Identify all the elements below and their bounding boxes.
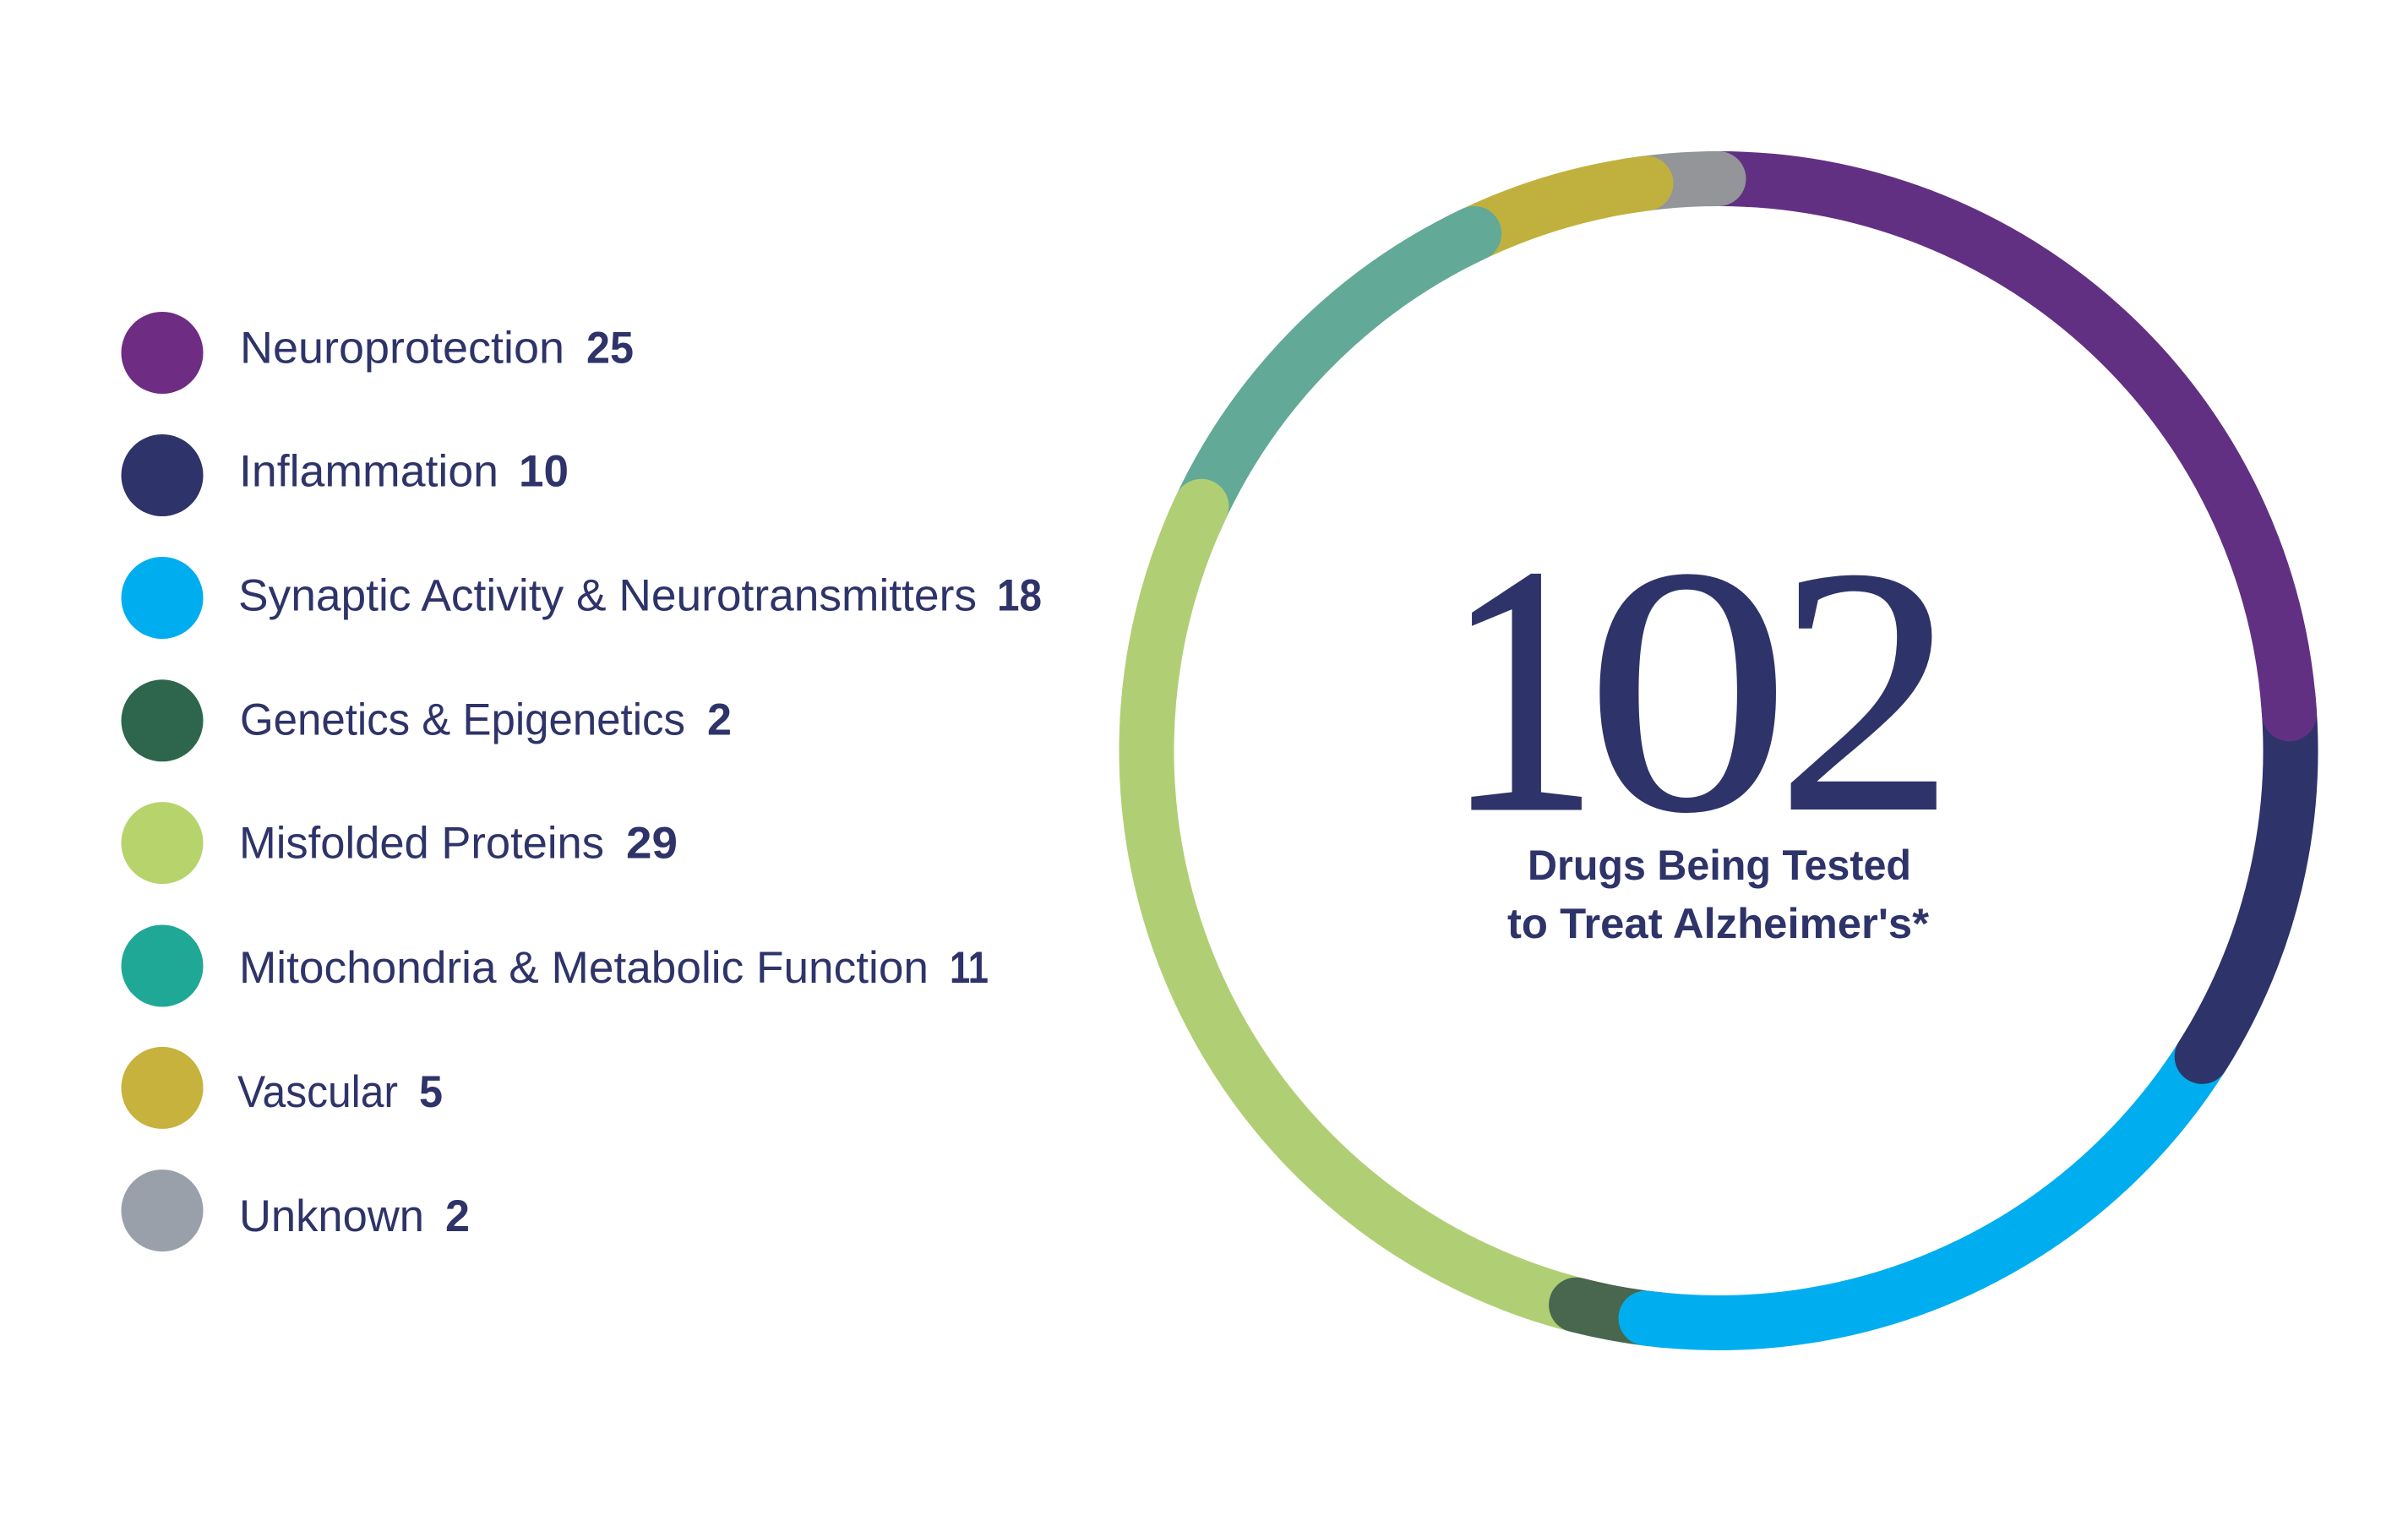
legend row: Synaptic Activity & Neurotransmitters 18: 18: [997, 571, 1042, 621]
legend row: Unknown 2: 2: [445, 1191, 470, 1241]
big number 102: 1: [1446, 495, 1598, 885]
legend row: Inflammation 10: 10: [519, 447, 569, 497]
segment: Unknown: [1628, 178, 1719, 186]
legend row: Vascular 5: [122, 1047, 443, 1129]
segment: Vascular: [1458, 183, 1646, 242]
segment: Synaptic Activity & Neurotransmitters: [1646, 1041, 2211, 1322]
legend row: Misfolded Proteins 29: Misfolded Proteins: [239, 819, 604, 869]
segment: Neuroprotection: [1719, 179, 2290, 714]
centre caption: [1507, 842, 1930, 947]
centre caption: to Treat Alzheimer's*: [1507, 900, 1930, 947]
legend row: Vascular 5: 5: [419, 1067, 443, 1117]
donut ring chart: [1147, 178, 2291, 1322]
legend row: Neuroprotection 25: 25: [586, 323, 634, 373]
legend row: Genetics & Epigenetics 2: [122, 679, 732, 761]
segment: Misfolded Proteins: [1147, 506, 1594, 1309]
legend row: Neuroprotection 25: Neuroprotection: [240, 323, 564, 373]
legend row: Neuroprotection 25: [122, 312, 634, 394]
segment: Mitochondria & Metabolic Function: [1194, 233, 1474, 522]
big number 102: [1446, 495, 1955, 885]
legend: [122, 312, 1042, 1251]
legend row: Inflammation 10: [122, 434, 569, 516]
centre caption: Drugs Being Tested: [1528, 842, 1911, 889]
legend row: Genetics & Epigenetics 2: Genetics & Epigenetics: [240, 695, 685, 745]
big number 102: 2: [1776, 496, 1955, 885]
legend row: Synaptic Activity & Neurotransmitters 18: Synaptic Activity & Neurotransmitters: [238, 571, 977, 621]
segment: Unknown rounded end cap over Neuroprotection: [1708, 151, 1719, 206]
legend row: Genetics & Epigenetics 2: 2: [707, 695, 732, 745]
legend row: Misfolded Proteins 29: [122, 802, 678, 884]
segment: Inflammation: [2202, 696, 2291, 1056]
legend row: Mitochondria & Metabolic Function 11: Mitochondria & Metabolic Function: [239, 943, 929, 993]
big number 102: 0: [1585, 496, 1790, 885]
segment: Genetics & Epigenetics: [1577, 1305, 1664, 1320]
legend row: Misfolded Proteins 29: 29: [626, 819, 678, 869]
legend row: Vascular 5: Vascular: [237, 1067, 398, 1117]
legend row: Mitochondria & Metabolic Function 11: 11: [950, 943, 989, 993]
legend row: Synaptic Activity & Neurotransmitters 18: [122, 557, 1042, 639]
legend row: Mitochondria & Metabolic Function 11: [122, 924, 989, 1007]
legend row: Unknown 2: Unknown: [239, 1191, 424, 1241]
legend row: Inflammation 10: Inflammation: [239, 447, 498, 497]
legend row: Unknown 2: [122, 1169, 470, 1251]
